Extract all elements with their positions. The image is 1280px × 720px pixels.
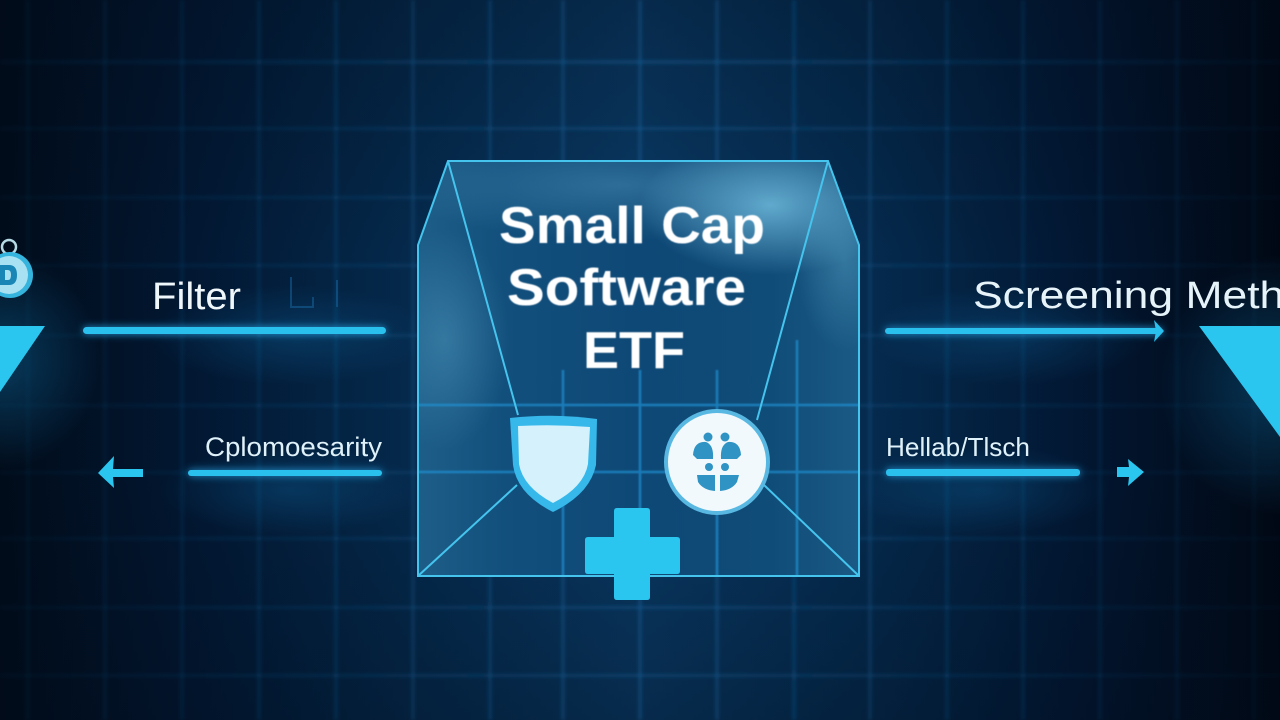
title: Software: [507, 259, 746, 317]
box body: [418, 161, 859, 576]
arrow: left: [98, 456, 143, 488]
line: healthtech: [886, 469, 1080, 476]
icon: left funnel: [0, 326, 45, 392]
icon: plus: [585, 508, 680, 600]
line: cybersecurity: [188, 470, 382, 476]
arrow line: screening: [885, 320, 1164, 342]
icon: brain in circle: [666, 411, 768, 513]
label: filter: Filter: [152, 276, 241, 318]
line: filter: [83, 327, 386, 334]
arrow: right: [1117, 459, 1144, 486]
box inner grid: [418, 340, 859, 576]
label: healthtech: Hellab/Tlsch: [886, 432, 1030, 462]
title: Small Cap: [499, 197, 765, 255]
box outline: [418, 161, 859, 576]
icon: lock: [0, 240, 33, 298]
title: ETF: [583, 322, 685, 380]
title: [499, 197, 765, 380]
panel: central glass box: [417, 160, 860, 577]
icon: shield: [510, 416, 597, 512]
ghost bars icon: [291, 277, 337, 307]
box highlights: [419, 162, 858, 420]
label: screening method: Screening Metho: [973, 275, 1280, 317]
label: cybersecurity: Cplomoesarity: [205, 432, 383, 462]
icon: right funnel: [1199, 326, 1280, 437]
